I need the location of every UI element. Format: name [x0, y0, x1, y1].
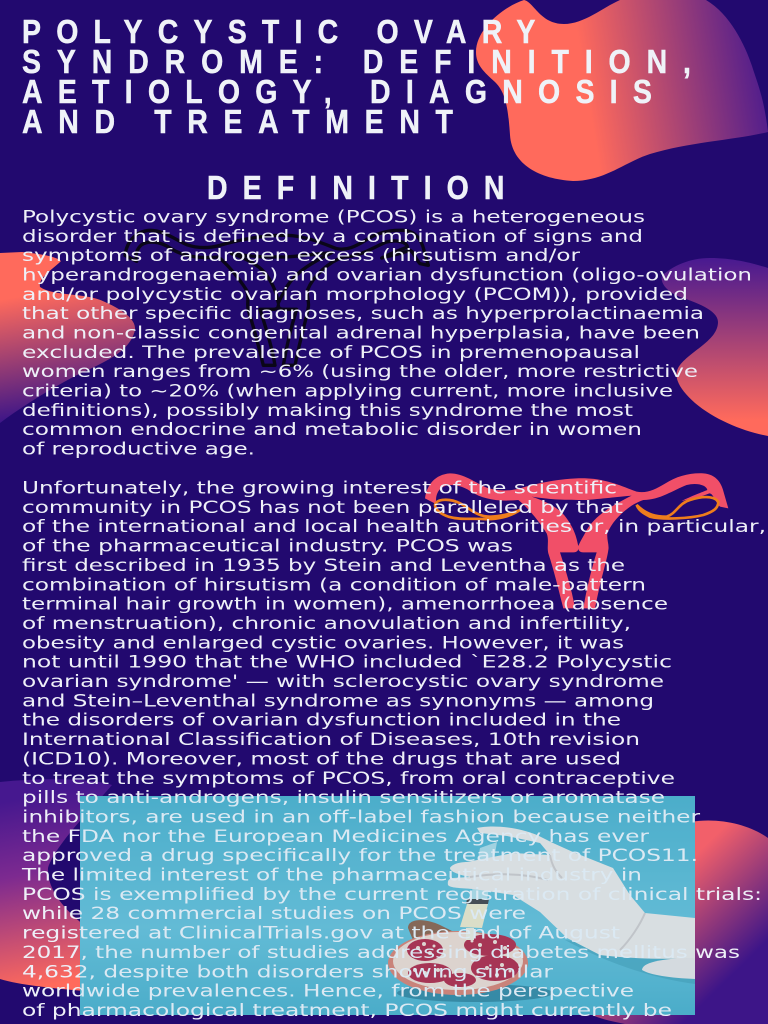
text block: history and treatment paragraph: of menstruation), chronic anovulation and infertility, — [22, 614, 631, 633]
syringe body — [460, 899, 489, 940]
blob: top right — [476, 0, 768, 181]
text block: history and treatment paragraph: The limited interest of the pharmaceutical industry in — [21, 866, 642, 884]
icon: black uterus outline — [125, 230, 428, 365]
icon: coral uterus — [425, 473, 728, 608]
photo backdrop — [80, 796, 695, 1015]
arm shadow — [565, 940, 695, 984]
blob: right — [662, 258, 768, 436]
text block: history and treatment paragraph: of the pharmaceutical industry. PCOS was — [22, 537, 513, 556]
photo: gloved hand with syringe and pomegranate — [80, 796, 695, 1015]
text block: definition paragraph: hyperandrogenaemia) and ovarian dysfunction (oligo-ovulation — [22, 266, 752, 284]
text block: history and treatment paragraph: the disorders of ovarian dysfunction included in the — [22, 711, 621, 730]
text block: history and treatment paragraph: combination of hirsutism (a condition of male-pattern — [22, 575, 646, 594]
text block: history and treatment paragraph: terminal hair growth in women), amenorrhoea (absence — [22, 595, 668, 614]
blob: left — [0, 252, 135, 423]
text block: definition paragraph: and non-classic congenital adrenal hyperplasia, have been — [22, 324, 700, 342]
text block: history and treatment paragraph: and Stein–Leventhal syndrome as synonyms — among — [22, 691, 654, 710]
text block: history and treatment paragraph: inhibitors, are used in an off-label fashion because neither — [22, 808, 700, 826]
title: AND TREATMENT — [22, 103, 453, 141]
syringe tube — [470, 842, 497, 902]
text block: definition paragraph: disorder that is defined by a combination of signs and — [22, 227, 643, 246]
ovary outlines — [435, 497, 718, 519]
blob: bottom right — [586, 820, 768, 1024]
title — [22, 13, 691, 141]
text block: history and treatment paragraph: International Classification of Diseases, 10th revision — [22, 730, 640, 749]
text block: history and treatment paragraph: Unfortunately, the growing interest of the scientific — [22, 478, 617, 498]
text block: definition paragraph: and/or polycystic ovarian morphology (PCOM)), provided — [22, 285, 688, 304]
text block: definition paragraph: women ranges from ~6% (using the older, more restrictive — [22, 362, 698, 381]
text block: definition paragraph: symptoms of androgen excess (hirsutism and/or — [22, 246, 580, 265]
title: AETIOLOGY, DIAGNOSIS — [22, 73, 652, 111]
title: SYNDROME: DEFINITION, — [22, 43, 691, 81]
text block: history and treatment paragraph: PCOS is exemplified by the current registration of clinical trials: — [22, 885, 762, 904]
text block: history and treatment paragraph: the FDA nor the European Medicines Agency has ever — [22, 827, 649, 846]
text block: history and treatment paragraph: while 28 commercial studies on PCOS were — [22, 904, 526, 923]
text block: history and treatment paragraph: to treat the symptoms of PCOS, from oral contraceptive — [22, 769, 675, 788]
text block: definition paragraph: that other specific diagnoses, such as hyperprolactinaemia — [22, 304, 704, 323]
blob: bottom left — [0, 779, 112, 991]
text block: history and treatment paragraph: of the international and local health authorities or, in particular, — [22, 517, 766, 536]
text block: history and treatment paragraph: approved a drug specifically for the treatment of PCOS11. — [22, 846, 698, 865]
pomegranate — [388, 920, 528, 995]
text block: history and treatment paragraph: ovarian syndrome' — with sclerocystic ovary syndrome — [22, 672, 664, 691]
text block: history and treatment paragraph: obesity and enlarged cystic ovaries. However, it was — [22, 633, 624, 652]
text block: history and treatment paragraph: worldwide prevalences. Hence, from the perspective — [22, 982, 634, 1001]
text block: definition paragraph: definitions), possibly making this syndrome the most — [22, 401, 634, 420]
text block: history and treatment paragraph — [21, 478, 766, 1020]
text block: history and treatment paragraph: (ICD10). Moreover, most of the drugs that are used — [22, 749, 621, 768]
text block: history and treatment paragraph: community in PCOS has not been paralleled by that — [22, 498, 624, 517]
pomegranate shadow — [397, 984, 553, 1002]
lower finger — [642, 958, 695, 979]
heading: definition: DEFINITION — [207, 169, 505, 207]
text block: history and treatment paragraph: not until 1990 that the WHO included `E28.2 Polycystic — [22, 653, 672, 672]
text block: definition paragraph: Polycystic ovary syndrome (PCOS) is a heterogeneous — [22, 208, 645, 226]
text block: definition paragraph: common endocrine and metabolic disorder in women — [22, 420, 642, 439]
text block: history and treatment paragraph: of pharmacological treatment, PCOS might currently be — [22, 1001, 672, 1020]
text block: history and treatment paragraph: first described in 1935 by Stein and Leventha as the — [22, 556, 625, 575]
title: POLYCYSTIC OVARY — [22, 13, 536, 51]
text block: definition paragraph: of reproductive age. — [22, 440, 255, 458]
text block: definition paragraph: criteria) to ~20% (when applying current, more inclusive — [22, 382, 673, 400]
gloved hand — [448, 826, 695, 959]
text block: history and treatment paragraph: registered at ClinicalTrials.gov at the end of August — [22, 924, 621, 943]
text block: definition paragraph — [22, 208, 752, 458]
text block: history and treatment paragraph: 2017, the number of studies addressing diabetes mellitus was — [22, 943, 740, 962]
glove creases — [470, 855, 645, 950]
text block: history and treatment paragraph: pills to anti-androgens, insulin sensitizers or aromatase — [22, 788, 665, 807]
photo tint over text — [80, 796, 695, 1015]
text block: definition paragraph: excluded. The prevalence of PCOS in premenopausal — [22, 343, 640, 362]
text block: history and treatment paragraph: 4,632, despite both disorders showing similar — [22, 962, 553, 981]
uterus and fallopian tubes — [425, 473, 728, 608]
